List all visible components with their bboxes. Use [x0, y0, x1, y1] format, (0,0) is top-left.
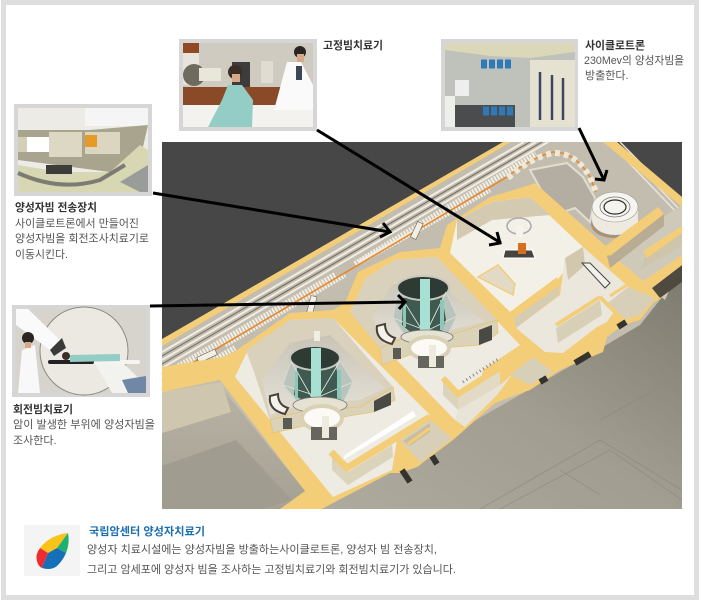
room 2 closets — [510, 357, 553, 385]
room 2 doors — [393, 348, 401, 359]
label: rotating gantry: 조사한다. — [13, 434, 57, 447]
beam magnets — [197, 221, 423, 363]
equipment bench — [582, 263, 610, 288]
room 3 fixed beam — [450, 197, 655, 353]
arrow: rotating gantry — [150, 295, 405, 309]
ground and corridor floor — [162, 142, 682, 509]
right annex walls — [600, 207, 682, 288]
room 2 rotating gantry — [350, 257, 553, 427]
room 1 floor — [235, 318, 430, 497]
room 1 rotating gantry — [235, 318, 452, 497]
blueprint lines — [480, 375, 682, 509]
label: cyclotron: 방출한다. — [585, 69, 629, 82]
room 1 inner walls — [332, 445, 393, 485]
cyclotron — [591, 192, 638, 238]
footer body text — [87, 542, 456, 576]
arrow: cyclotron — [579, 128, 607, 180]
photo: rotating gantry — [12, 305, 150, 397]
room 2 inner walls — [443, 381, 458, 410]
right closet floor — [605, 287, 655, 320]
building wall mass — [162, 183, 663, 509]
room 2 dividing wall — [380, 320, 498, 365]
room 2 gantry — [393, 276, 457, 368]
label: beam transport: 사이클로트론에서 만들어진 — [15, 217, 139, 230]
room 1 dividing wall — [270, 387, 395, 433]
corridor rails — [162, 142, 682, 391]
beam magnets arc — [508, 153, 596, 192]
room 3 lower wall — [514, 286, 559, 328]
room 2 lower floor — [455, 375, 512, 427]
footer heading: 국립암센터 양성자치료기 — [89, 524, 205, 538]
left wing wall — [162, 382, 231, 433]
top building edge strips — [162, 142, 682, 346]
photo: beam transport — [14, 104, 152, 196]
label: cyclotron — [584, 39, 684, 82]
dark backdrop — [162, 142, 682, 509]
room 2 beam nozzle — [377, 324, 395, 344]
label: beam transport: 양성자빔을 회전조사치료기로 — [15, 232, 149, 245]
logo icon — [24, 525, 80, 576]
arrows — [150, 128, 607, 309]
room 3 floor — [450, 197, 583, 312]
label: rotating gantry: 암이 발생한 부위에 양성자빔을 — [13, 418, 155, 431]
outer ground bottom right — [320, 272, 682, 509]
footer body text: 그리고 암세포에 양성자 빔을 조사하는 고정빔치료기와 회전빔치료기가 있습니다. — [87, 562, 456, 576]
room 1 gantry — [283, 346, 353, 440]
label: beam transport — [15, 201, 149, 261]
room 3 treatment couch — [503, 218, 535, 258]
label: beam transport: 이동시킨다. — [15, 248, 68, 261]
cutaway facility illustration — [162, 142, 682, 509]
arrow: fixed beam — [317, 130, 501, 245]
right side room walls — [565, 247, 585, 280]
room 3 back wall — [457, 197, 550, 240]
photo: fixed beam treatment — [179, 39, 317, 131]
label: cyclotron: 230Mev의 양성자빔을 — [584, 54, 684, 67]
room 1 closets — [399, 420, 452, 463]
label: beam transport: 양성자빔 전송장치 — [15, 201, 97, 214]
left wing floor — [162, 388, 305, 509]
D shaped vault — [530, 163, 595, 232]
arrow: beam transport — [153, 193, 390, 237]
label: rotating gantry — [13, 402, 155, 447]
room 2 floor — [350, 257, 520, 420]
lower closet walls — [556, 300, 602, 343]
right side room floor — [516, 247, 630, 353]
doors at outer edge — [402, 322, 626, 482]
room 3 closet — [478, 265, 515, 295]
room 1 doors — [283, 418, 292, 429]
room 2 back wall — [350, 257, 497, 348]
right annex floor — [607, 205, 682, 300]
footer body text: 양성자 치료시설에는 양성자빔을 방출하는사이클로트론, 양성자 빔 전송장치, — [87, 542, 437, 556]
proton beam line — [162, 152, 596, 381]
right annex wall faces — [607, 214, 664, 268]
photo: cyclotron — [441, 39, 578, 131]
room 1 beam nozzle — [270, 394, 288, 414]
label: rotating gantry: 회전빔치료기 — [13, 402, 73, 416]
room 1 back wall — [246, 318, 393, 420]
label: fixed beam: 고정빔치료기 — [323, 38, 383, 52]
label: cyclotron: 사이클로트론 — [585, 39, 645, 52]
